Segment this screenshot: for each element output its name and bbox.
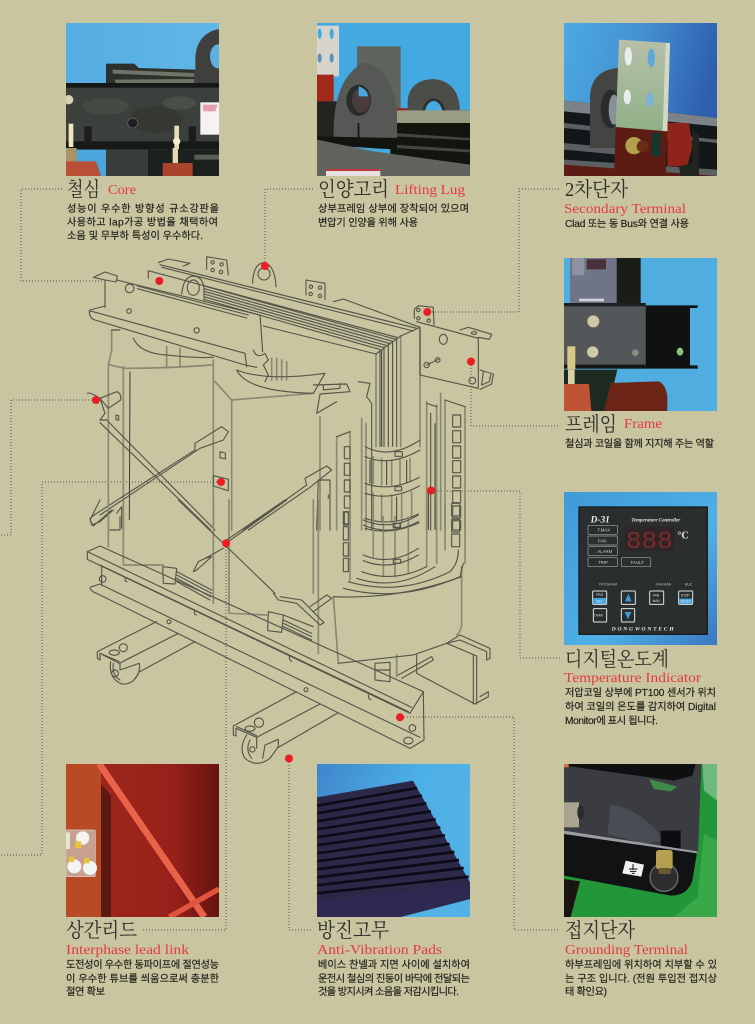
description: interphase lead link: 도전성이 우수한 동파이프에 절연성능 [66,958,219,971]
heading: core: 철심 [67,178,100,201]
photo: frame [564,258,717,411]
photo: temperature controller: STOP [681,593,690,597]
frame, core and rods [87,257,493,531]
description: interphase lead link [66,958,220,998]
description: core [67,203,219,242]
english label: interphase lead link: Interphase lead link [66,943,189,958]
english label: anti-vibration pads: Anti-Vibration Pads [317,943,442,958]
description: interphase lead link: 절연 확보 [66,985,105,998]
panel: grounding terminal [564,764,718,998]
photo: core [66,23,219,176]
photo: secondary terminal [564,23,717,176]
photo: temperature controller: TRIP [598,560,608,565]
lower transformer section [87,500,490,763]
heading: interphase lead link: 상간리드 [66,919,137,942]
leader lines [0,189,560,930]
heading: grounding terminal: 접지단자 [565,919,636,942]
description: grounding terminal: 는 구조 입니다. (전원 투입전 접지상 [565,972,718,985]
photo: temperature controller: 888 [626,529,673,556]
photo: temperature controller: BUZ. [685,582,693,586]
heading: frame: 프레임 [565,413,617,436]
upper transformer section [87,257,493,531]
description: lifting lug: 상부프레임 상부에 장착되어 있으며 [318,202,469,215]
photo: temperature controller: PRG [596,593,604,597]
heading: secondary terminal: 2차단자 [565,178,629,201]
photo: temperature controller: T.MAX [594,614,604,618]
panel: secondary terminal [564,23,717,230]
photo: temperature controller: FAN MAN [656,582,672,586]
panel: interphase lead link [66,764,220,998]
panel: temperature indicator [564,492,717,727]
photo: temperature controller: PROGRAM [599,582,617,586]
photo: temperature controller: °C [677,531,689,542]
description: frame: 철심과 코일을 함께 지지해 주는 역할 [565,437,715,450]
photo: temperature controller: RESET [680,600,691,604]
description: secondary terminal: Clad 또는 동 Bus와 연결 사용 [565,218,689,230]
heading: temperature indicator: 디지털온도계 [565,648,669,671]
lower details [87,500,490,763]
heading: lifting lug: 인양고리 [318,178,389,201]
photo: temperature controller: SET [596,600,603,604]
description: temperature indicator: 저압코일 상부에 PT100 센서가 위치 [565,686,716,699]
description: interphase lead link: 이 우수한 튜브를 씌움으로써 충분한 [66,973,220,985]
panel: anti-vibration pads [317,764,470,998]
description: anti-vibration pads [318,958,470,998]
description: core: 소음 및 무부하 특성이 우수하다. [67,229,203,242]
photo: temperature controller: D-31 [590,516,610,526]
panel: lifting lug [317,23,470,229]
description: anti-vibration pads: 것을 방지시켜 소음을 저감시킵니다. [318,985,459,998]
english label: secondary terminal: Secondary Terminal [564,202,686,217]
photo: temperature controller: FAN [598,538,606,543]
english label: core: Core [108,183,136,198]
photo: temperature controller: MAN [653,599,660,603]
description: grounding terminal: 하부프레임에 위치하여 치부할 수 있 [565,958,717,971]
red marker dots [92,262,475,762]
photo: lifting lug [317,23,470,176]
description: anti-vibration pads: 운전시 철심의 진동이 바닥에 전달되는 [318,973,470,985]
photo: temperature controller: DONGWONTECH [611,626,674,632]
english label: grounding terminal: Grounding Terminal [565,943,688,958]
diagram: transformer line drawing [87,257,493,763]
photo: temperature controller: T.MAX [597,528,610,533]
lower coil outlines [108,500,465,677]
panel: frame [564,258,717,450]
english label: lifting lug: Lifting Lug [395,183,465,198]
photo: interphase lead [66,764,219,917]
heading: anti-vibration pads: 방진고무 [317,919,389,942]
english label: frame: Frame [624,417,662,432]
description: lifting lug: 변압기 인양을 위해 사용 [318,216,418,229]
description: grounding terminal: 태 확인요) [565,986,607,998]
english label: temperature indicator: Temperature Indicator [564,671,701,686]
description: anti-vibration pads: 베이스 찬넬과 지면 사이에 설치하여 [318,958,470,971]
description: temperature indicator: Monitor에 표시 됩니다. [565,714,658,727]
dark details [129,342,435,530]
description: core: 사용하고 lap가공 방법을 채택하여 [67,216,218,228]
photo: temperature controller: FAULT [631,560,644,565]
photo: grounding terminal [564,764,717,917]
description: grounding terminal [565,958,718,998]
coil outlines [108,328,465,530]
photo: temperature controller [564,492,717,645]
description: temperature indicator: 하여 코일의 온도를 감지하여 Digital [565,700,716,713]
photo: temperature controller: Temperature Controller [631,518,680,523]
description: core: 성능이 우수한 방향성 규소강판을 [67,203,219,215]
description: lifting lug [318,202,469,229]
photo: rubber pad [317,764,470,917]
description: temperature indicator [565,686,716,727]
panel: core [64,23,226,242]
photo: temperature controller: FAN [653,594,660,598]
photo: temperature controller: ALARM [597,549,613,554]
